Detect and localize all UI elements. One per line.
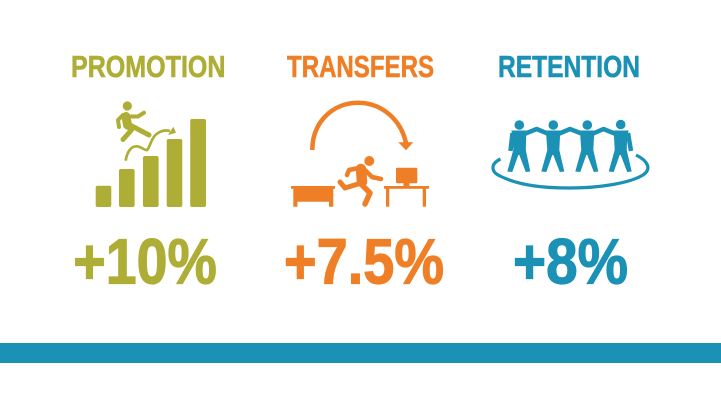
heading: promotion: PROMOTION bbox=[71, 49, 226, 84]
heading: retention: RETENTION bbox=[498, 49, 640, 84]
icon: climbing bar chart bbox=[96, 101, 206, 207]
heading: transfers: TRANSFERS bbox=[287, 49, 434, 84]
icon: employee moving between desks bbox=[291, 103, 429, 207]
stat: promotion +10%: +10% bbox=[73, 226, 217, 298]
stat: retention +8%: +8% bbox=[513, 226, 628, 298]
column: promotion bbox=[71, 49, 226, 207]
column: retention bbox=[493, 49, 648, 188]
stat: transfers +7.5%: +7.5% bbox=[284, 226, 444, 298]
icon: team holding hands bbox=[493, 120, 648, 188]
bottom band bbox=[0, 343, 721, 363]
column: transfers bbox=[287, 49, 434, 207]
